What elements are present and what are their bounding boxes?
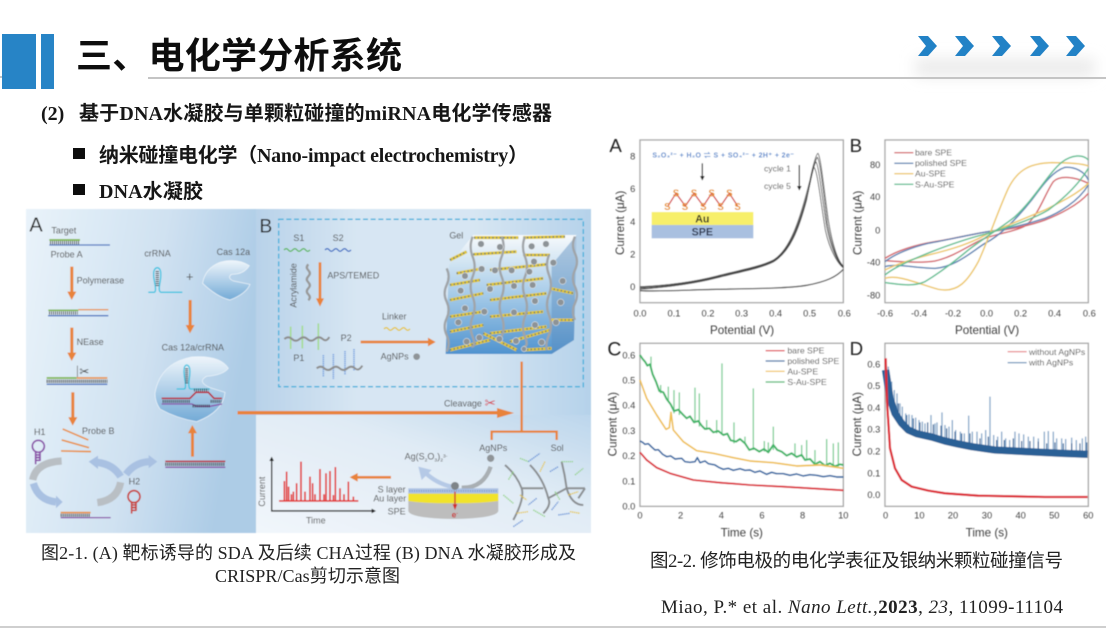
panel A: target recycling: H2 <box>129 476 140 486</box>
inset: reaction and sulfur layer: S₂O₃²⁻ + H₂O ⇌ S + SO₄²⁻ + 2H⁺ + 2e⁻ <box>652 151 794 159</box>
inset: reaction and sulfur layer: cycle 5 <box>764 181 791 191</box>
axis ticks and labels D: 50 <box>1049 510 1060 520</box>
chart C: chronoamperometry: C <box>607 340 621 361</box>
axis ticks and labels A: 0.0 <box>634 309 646 319</box>
label A: A <box>29 215 43 237</box>
panel B: hydrogel and detection: 2 <box>440 457 443 463</box>
panel B: hydrogel and detection: Gel <box>449 230 463 240</box>
axis ticks and labels A: 0.6 <box>838 309 851 319</box>
axis ticks and labels A: 4 <box>630 217 635 227</box>
probe B strands <box>61 429 91 452</box>
DNA duplex 2 <box>48 310 108 316</box>
axis ticks and labels A: 0.1 <box>668 309 680 319</box>
axis ticks and labels B: Current (μA) <box>852 191 865 255</box>
axis ticks and labels A: Current (μA) <box>614 191 627 255</box>
strands S1 S2 <box>284 249 351 251</box>
axis ticks and labels D: 0.6 <box>867 359 880 369</box>
icon: blue title bars <box>2 34 54 89</box>
DNA duplex red/purple <box>165 461 225 467</box>
axis ticks and labels D <box>851 359 1094 539</box>
traces D <box>886 358 1088 497</box>
axis ticks and labels A: 0 <box>630 282 635 292</box>
crRNA and Cas 12a: Cas 12a <box>217 247 250 257</box>
axis ticks and labels D: 10 <box>914 510 925 520</box>
hairpin H2 <box>128 491 140 514</box>
citation: Miao, P.* et al. Nano Lett.,2023, 23, 11099-11104 <box>661 597 1064 618</box>
axis ticks and labels A <box>614 151 851 337</box>
panel B: hydrogel and detection: 2 <box>425 457 428 463</box>
panel B: hydrogel and detection: Au layer <box>373 494 406 504</box>
crRNA and Cas 12a: + <box>186 270 193 284</box>
CV curves B <box>885 156 1088 290</box>
panel B: hydrogel and detection: P1 <box>293 353 304 363</box>
panel B: hydrogel and detection: AgNPs <box>381 351 409 361</box>
legend B <box>894 148 967 189</box>
axis ticks and labels C: 0.0 <box>622 501 635 511</box>
panel A: target recycling: Cas 12a/crRNA <box>162 342 224 352</box>
panel B: hydrogel and detection: 3- <box>443 453 448 459</box>
axis ticks and labels C: 6 <box>759 510 765 520</box>
label B: B <box>259 216 272 237</box>
title: 三、电化学分析系统 <box>76 35 402 76</box>
axis ticks and labels A: 6 <box>630 184 635 194</box>
legend C: S-Au-SPE <box>787 377 827 387</box>
axis ticks and labels D: 30 <box>982 510 992 520</box>
panel A: target recycling: NEase <box>77 337 104 347</box>
panel B: hydrogel and detection: 3 <box>434 457 437 463</box>
current time trace: Time <box>306 515 326 525</box>
panel B: hydrogel and detection: APS/TEMED <box>327 270 380 280</box>
axis ticks and labels B: 0.0 <box>980 309 993 319</box>
chart A: CV cycles: A <box>609 135 622 156</box>
panel B: hydrogel and detection: ) <box>437 452 440 462</box>
axis ticks and labels A: 0.2 <box>702 309 714 319</box>
panel A: target recycling: Target <box>51 226 77 236</box>
legend B: polished SPE <box>915 158 967 168</box>
panel A: target recycling: Polymerase <box>77 276 124 286</box>
panel B: hydrogel and detection: AgNPs <box>479 443 508 453</box>
panel B: hydrogel and detection: O <box>427 452 434 462</box>
axis ticks and labels C <box>607 351 849 539</box>
axis ticks and labels D: 0.3 <box>867 425 880 435</box>
DNA duplex bottom <box>61 513 111 518</box>
arrow down to probe B <box>68 392 77 426</box>
axis ticks and labels B: -80 <box>867 291 880 301</box>
crRNA and Cas 12a <box>144 247 250 300</box>
polymer P2 <box>317 349 362 379</box>
axis ticks and labels A: 0.5 <box>803 309 816 319</box>
dashed frame <box>279 219 583 387</box>
axis ticks and labels B: 0.4 <box>1048 309 1061 319</box>
sol network <box>503 453 585 527</box>
legend C: Au-SPE <box>787 366 818 376</box>
panel B: hydrogel and detection: Ag(S <box>405 452 425 462</box>
panel B: hydrogel and detection: S2 <box>333 233 344 243</box>
inset: reaction and sulfur layer: SPE <box>692 227 713 239</box>
panel B: hydrogel and detection: - <box>456 511 458 517</box>
axis ticks and labels D: Current (μA) <box>851 392 864 456</box>
inset: reaction and sulfur layer: S <box>734 202 741 213</box>
legend B: S-Au-SPE <box>915 179 955 189</box>
icon: red scissors: ✂ <box>485 396 496 411</box>
crRNA and Cas 12a: crRNA <box>144 249 171 259</box>
particle reaction arrows <box>418 467 491 488</box>
bullet list <box>73 143 528 203</box>
axis ticks and labels C: Current (μA) <box>607 392 620 456</box>
axis ticks and labels C: 10 <box>838 510 849 520</box>
axis ticks and labels D: 0.1 <box>867 468 880 478</box>
legend B: Au-SPE <box>915 169 946 179</box>
panel B: hydrogel and detection <box>257 216 585 527</box>
legend C <box>766 346 840 387</box>
axis ticks and labels D: 0.0 <box>867 490 880 500</box>
inset: reaction and sulfur layer <box>652 151 802 239</box>
chart A: CV cycles <box>609 135 851 337</box>
panel B: hydrogel and detection: Sol <box>551 443 564 453</box>
bracket from gel to products <box>492 362 557 440</box>
figure 2-1 schematic <box>26 209 591 533</box>
axis ticks and labels B: 40 <box>870 192 880 202</box>
chart B: CV modified electrodes: B <box>850 135 862 156</box>
inset: reaction and sulfur layer: S <box>708 189 715 200</box>
caption figure 2-2: 图2-2. 修饰电极的电化学表征及银纳米颗粒碰撞信号 <box>650 551 1063 572</box>
hydrogel cube <box>445 235 577 354</box>
panel B: hydrogel and detection: Linker <box>382 311 406 321</box>
axis ticks and labels C: 8 <box>800 510 805 520</box>
axis ticks and labels B <box>852 160 1096 337</box>
axis ticks and labels D: 0 <box>883 510 888 520</box>
axis ticks and labels B: 0 <box>875 225 880 235</box>
axis ticks and labels C: 0.1 <box>622 476 635 486</box>
DNA duplex 1 <box>49 240 110 245</box>
DNA duplex 3 with scissors: ✂ <box>79 365 89 379</box>
axis ticks and labels A: 0.3 <box>735 309 748 319</box>
catalytic cycle arrows <box>33 455 157 508</box>
arrow up <box>188 425 197 457</box>
axis ticks and labels C: 0.6 <box>622 351 635 361</box>
panel A: target recycling: Probe B <box>82 426 114 436</box>
axis ticks and labels C: 0.5 <box>622 376 635 386</box>
icon: chevrons <box>918 36 1085 56</box>
axis ticks and labels D: 0.5 <box>867 381 880 391</box>
panel B: hydrogel and detection: S layer <box>378 484 406 494</box>
polymer P1 <box>284 323 329 350</box>
figure 2-2 charts <box>607 135 1096 539</box>
legend D: with AgNPs <box>1028 358 1074 368</box>
axis ticks and labels B: 0.6 <box>1083 309 1096 319</box>
axis ticks and labels C: 0.3 <box>622 426 635 436</box>
axis ticks and labels B: Potential (V) <box>955 324 1019 337</box>
bullet text: nano-impact: 纳米碰撞电化学（Nano-impact electrochemistry） <box>99 143 528 167</box>
axis ticks and labels C: 2 <box>678 510 683 520</box>
arrow NEase <box>67 328 76 361</box>
caption figure 2-1: 图2-1. (A) 靶标诱导的 SDA 及后续 CHA过程 (B) DNA 水凝胶形成及 <box>41 543 576 564</box>
inset: reaction and sulfur layer: S <box>664 202 671 213</box>
chart D: with and without AgNPs: D <box>850 338 863 359</box>
axis ticks and labels B: 0.2 <box>1014 309 1027 319</box>
inset: reaction and sulfur layer: S <box>717 202 724 213</box>
axis ticks and labels D: 60 <box>1083 510 1094 520</box>
axis ticks and labels B: -40 <box>867 258 880 268</box>
panel B: hydrogel and detection: Cleavage <box>444 398 482 408</box>
traces C <box>640 355 843 490</box>
panel B: hydrogel and detection: P2 <box>341 333 352 343</box>
CV curves <box>640 153 843 291</box>
axis ticks and labels D: 0.2 <box>867 446 880 456</box>
panel A: target recycling: H1 <box>34 427 45 437</box>
axis ticks and labels A: 0.4 <box>769 309 782 319</box>
axis ticks and labels C: 0 <box>637 510 643 520</box>
axis ticks and labels A: Potential (V) <box>710 324 774 337</box>
panel B: hydrogel and detection: Acrylamide <box>288 263 298 308</box>
legend B: bare SPE <box>915 148 952 158</box>
orange connector arrow <box>238 408 514 418</box>
axis ticks and labels B: -0.2 <box>945 309 961 319</box>
arrow to complex <box>186 300 195 333</box>
arrow to trace <box>350 473 391 482</box>
panel B: hydrogel and detection: e <box>452 510 456 520</box>
axis ticks and labels D: 0.4 <box>867 403 880 413</box>
inset: reaction and sulfur layer: S <box>700 202 707 213</box>
axis ticks and labels B: 80 <box>870 160 880 170</box>
axis ticks and labels A: 8 <box>630 151 635 161</box>
panel A: target recycling: Probe A <box>51 250 83 260</box>
axis ticks and labels C: 4 <box>719 510 724 520</box>
Cas 12a crRNA complex <box>155 357 228 422</box>
axis ticks and labels C: Time (s) <box>721 526 763 539</box>
subtitle: 基于DNA水凝胶与单颗粒碰撞的miRNA电化学传感器 <box>79 101 552 125</box>
inset: reaction and sulfur layer: cycle 1 <box>764 164 791 174</box>
inset: reaction and sulfur layer: S <box>726 189 733 200</box>
axis ticks and labels D: 40 <box>1015 510 1026 520</box>
inset: reaction and sulfur layer: S <box>691 189 698 200</box>
current time trace: Current <box>257 476 267 507</box>
panel B: hydrogel and detection: S1 <box>293 233 304 243</box>
arrow APS/TEMED <box>316 262 324 307</box>
chart D: with and without AgNPs <box>850 338 1094 539</box>
caption figure 2-1: CRISPR/Cas剪切示意图 <box>215 566 400 586</box>
hairpin H1 <box>32 440 44 464</box>
axis ticks and labels D: 20 <box>948 510 958 520</box>
legend D <box>1008 347 1086 368</box>
legend D: without AgNPs <box>1028 347 1086 357</box>
axis ticks and labels C: 0.4 <box>622 401 635 411</box>
panel B: hydrogel and detection: SPE <box>388 506 406 516</box>
DNA duplex 3 with scissors <box>47 365 107 384</box>
panel A: target recycling <box>29 215 250 518</box>
inset: reaction and sulfur layer: S <box>673 189 680 200</box>
page header <box>0 34 1106 89</box>
arrow to gel <box>361 338 436 346</box>
axis ticks and labels B: -0.4 <box>911 309 927 319</box>
axis ticks and labels B: -0.6 <box>877 309 893 319</box>
arrow polymerase <box>67 267 76 300</box>
electrode disc <box>408 482 498 519</box>
axis ticks and labels C: 0.2 <box>622 451 635 461</box>
chart C: chronoamperometry <box>607 340 849 539</box>
inset: reaction and sulfur layer: S <box>682 202 689 213</box>
axis ticks and labels D: Time (s) <box>966 526 1008 539</box>
legend C: bare SPE <box>787 346 825 356</box>
axis ticks and labels A: 2 <box>630 250 635 260</box>
bullet text: DNA hydrogel: DNA水凝胶 <box>99 179 203 203</box>
subtitle: (2) <box>41 103 64 125</box>
inset: reaction and sulfur layer: Au <box>695 213 709 225</box>
legend C: polished SPE <box>787 356 840 366</box>
current time trace <box>257 457 376 525</box>
chart B: CV modified electrodes <box>850 135 1096 337</box>
caption figure 2-1 <box>41 543 576 586</box>
